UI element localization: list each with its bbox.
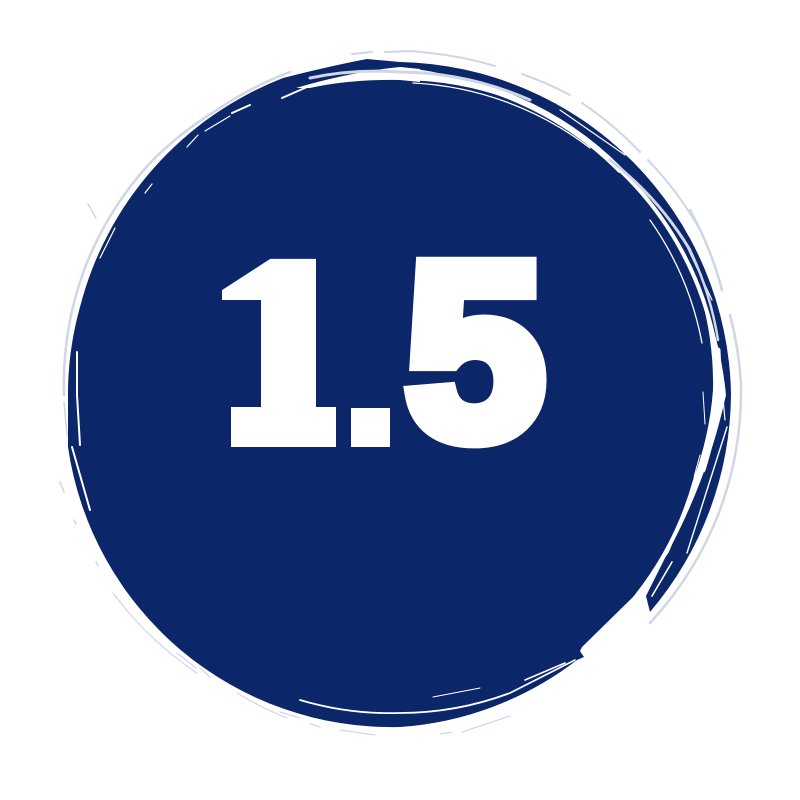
navy painted disk [68,59,713,727]
value: 1.5: 1 [215,218,350,489]
value: 1.5: . [347,266,400,478]
badge graphic [59,50,742,736]
brush-stroke circle [60,51,741,735]
navy lower-right brush crescent [646,395,731,612]
white gap under top brush sweep [296,67,420,88]
white gaps and dry-brush streaks [72,73,727,713]
value: 1.5 [222,256,547,448]
faint outer brush strokes [60,51,741,735]
navy outer brush band [400,62,731,395]
light grey dry-brush streaks [64,71,718,395]
value: 1.5: 5 [406,212,544,490]
